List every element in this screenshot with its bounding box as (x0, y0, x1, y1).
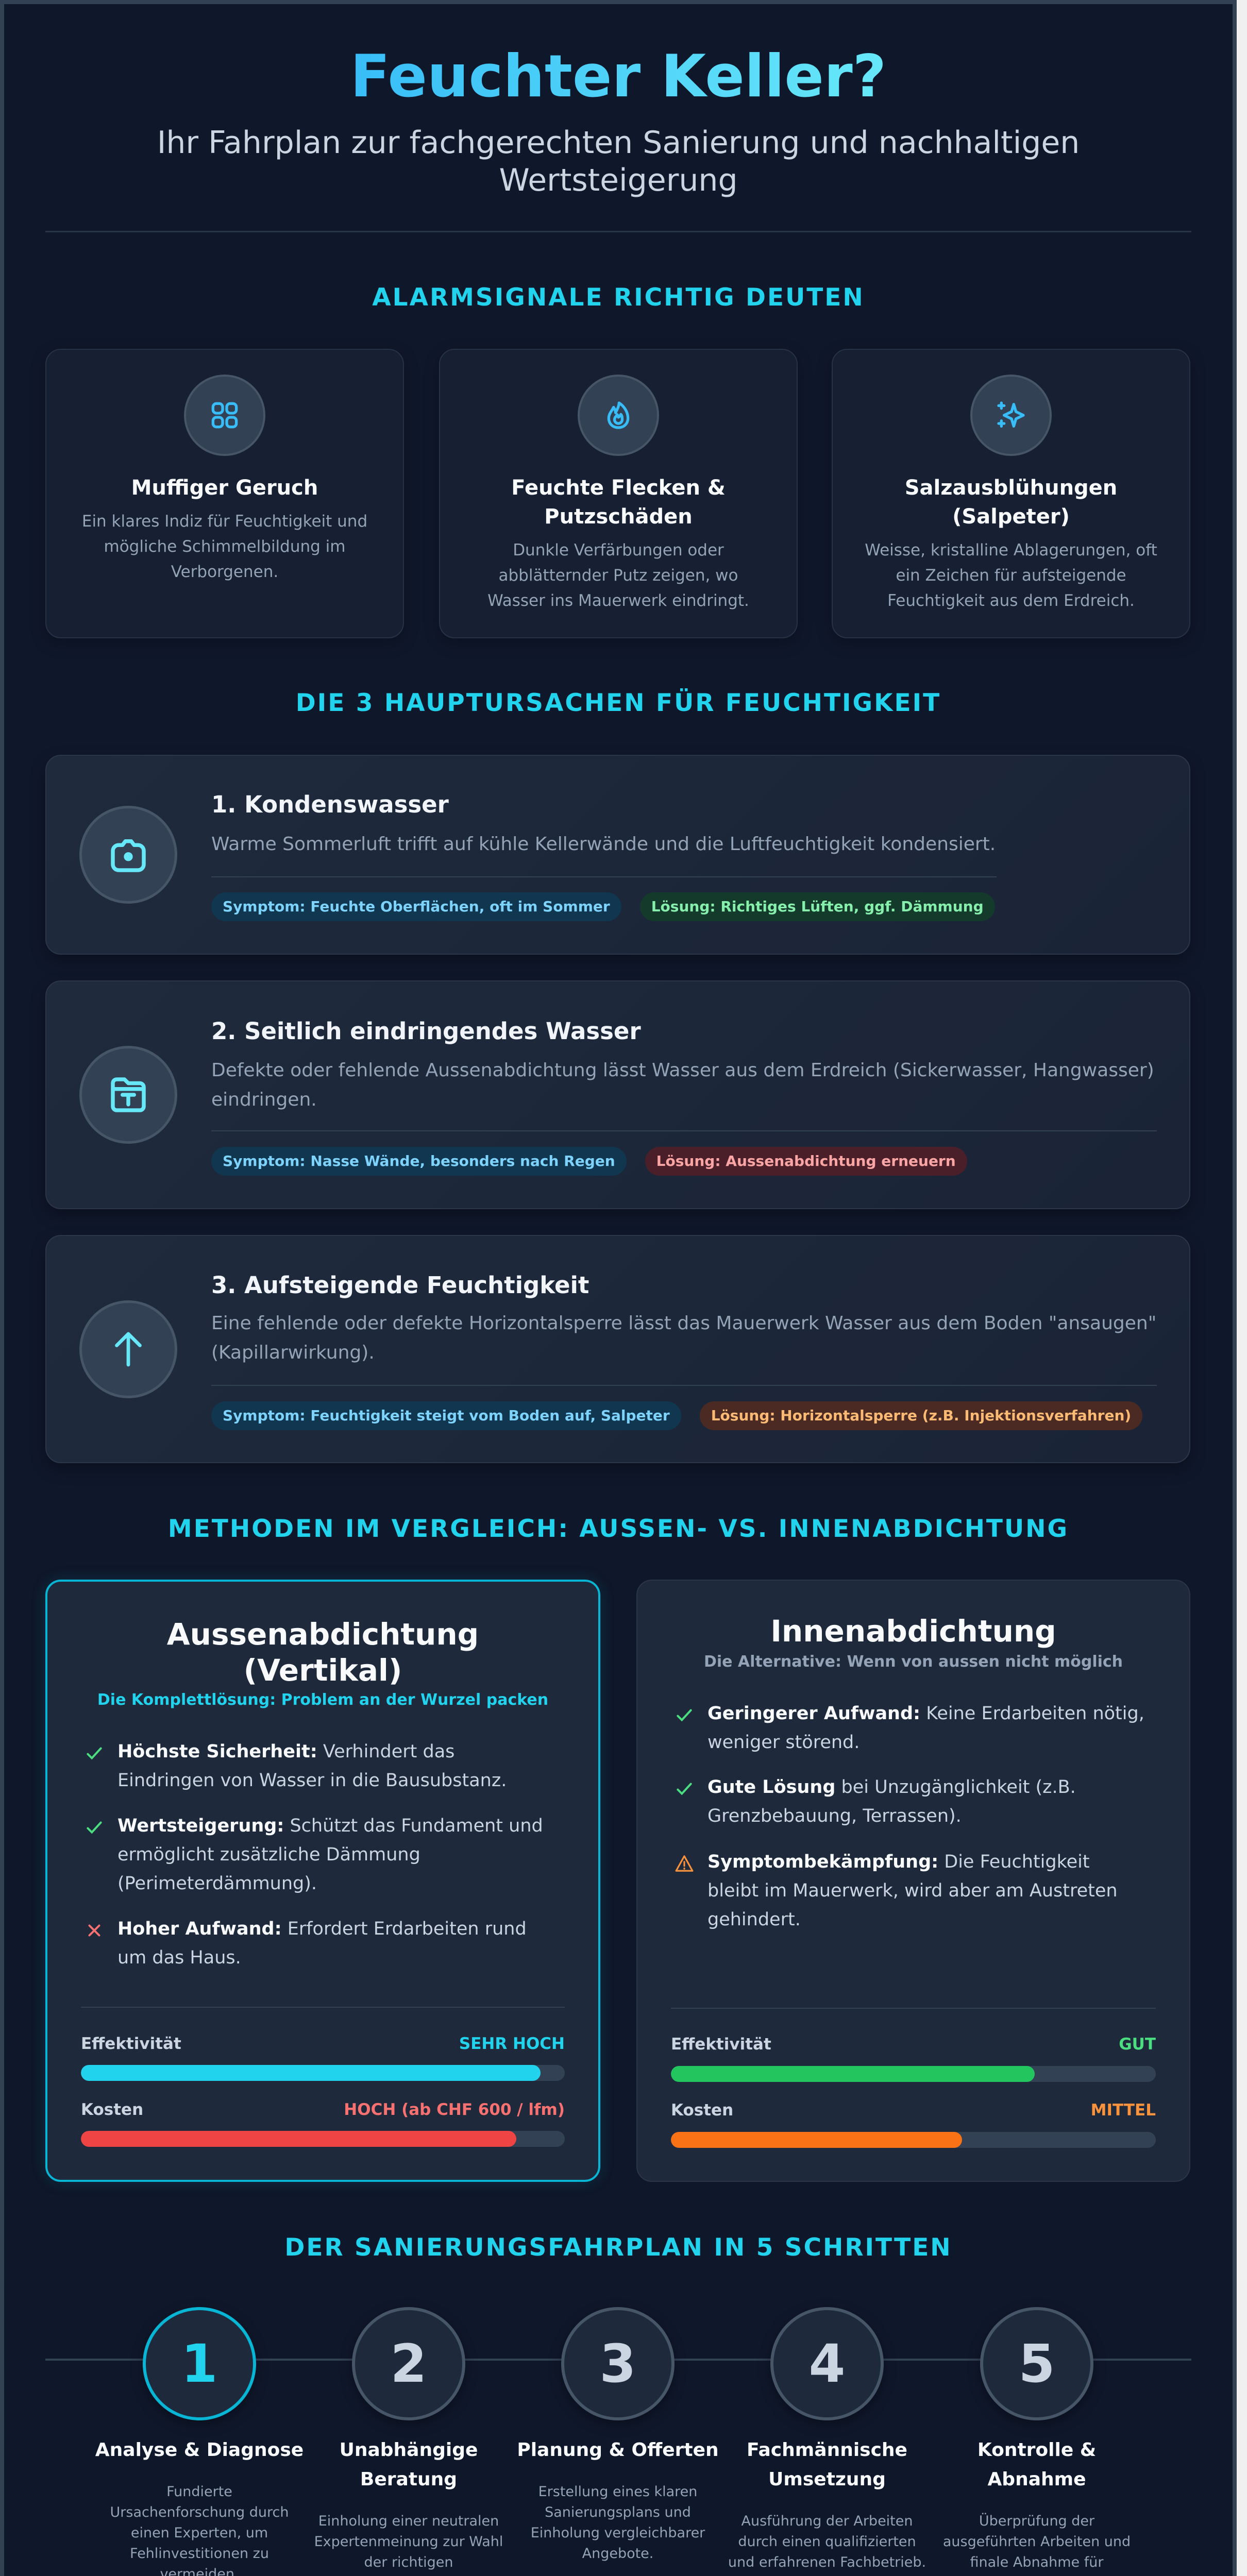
card text (82, 512, 367, 581)
metric: effektivität: Effektivität (81, 2035, 181, 2053)
panel: alarm card 2 (439, 349, 798, 638)
card title (511, 476, 726, 529)
step title: Fachmännische (747, 2439, 907, 2461)
step text: Einholung vergleichbarer (531, 2525, 705, 2541)
subtitle: Ihr Fahrplan zur fachgerechten Sanierung und nachhaltigen (157, 125, 1080, 161)
tags: Symptom: Nasse Wände, besonders nach Regen (223, 1153, 615, 1170)
step text (510, 2482, 726, 2564)
title: Feuchter Keller? (350, 42, 886, 110)
pro item (87, 1816, 543, 1894)
tags: Lösung: Aussenabdichtung erneuern (656, 1153, 956, 1170)
step title: Beratung (360, 2469, 457, 2490)
pro item: Grenzbebauung, Terrassen). (707, 1806, 962, 1826)
cause title: 1. Kondenswasser (211, 791, 449, 818)
panel title (167, 1617, 479, 1688)
panel: cause 3 (45, 1235, 1190, 1463)
step text: Ausführung der Arbeiten (741, 2513, 913, 2529)
step text: Expertenmeinung zur Wahl (314, 2534, 503, 2550)
step text: Einholung einer neutralen (318, 2513, 499, 2529)
card text (487, 541, 749, 610)
step 5 (929, 2307, 1145, 2576)
pro item: Geringerer Aufwand: Keine Erdarbeiten nötig, (707, 1703, 1144, 1724)
step text: Angebote. (582, 2546, 653, 2562)
subtitle: Wertsteigerung (499, 162, 738, 198)
warning item: gehindert. (707, 1909, 801, 1930)
cause text (211, 1313, 1156, 1363)
step number (561, 2307, 675, 2420)
heading: alarmsignale: ALARMSIGNALE RICHTIG DEUTEN (372, 283, 865, 312)
metric: kosten (81, 2100, 565, 2119)
step text (300, 2511, 517, 2576)
warning item: bleibt im Mauerwerk, wird aber am Austreten (707, 1880, 1118, 1901)
step text: durch einen qualifizierten (738, 2534, 916, 2550)
panel: alarm card 3 (832, 349, 1190, 638)
heading: fahrplan: DER SANIERUNGSFAHRPLAN IN 5 SCHRITTEN (284, 2233, 952, 2262)
card text: ein Zeichen für aufsteigende (896, 566, 1126, 585)
icon: folder (79, 1046, 177, 1144)
step number (352, 2307, 465, 2420)
step number (143, 2307, 256, 2420)
panel: aussenabdichtung (45, 1580, 600, 2182)
step title (929, 2435, 1145, 2494)
step title: Analyse & Diagnose (95, 2439, 304, 2461)
cause text (211, 1060, 1154, 1110)
step title (300, 2435, 517, 2494)
card title: Salzausblühungen (905, 476, 1117, 500)
heading: ursachen: DIE 3 HAUPTURSACHEN FÜR FEUCHTIGKEIT (296, 689, 941, 717)
icon: grid (184, 375, 265, 456)
card text: mögliche Schimmelbildung im (104, 537, 345, 556)
panel title: (Vertikal) (244, 1653, 402, 1688)
bar: kosten (81, 2131, 565, 2147)
con item (88, 1919, 527, 1968)
pro item: (Perimeterdämmung). (117, 1873, 317, 1894)
tags (211, 1147, 967, 1176)
pro item: Gute Lösung bei Unzugänglichkeit (z.B. (707, 1777, 1076, 1798)
step text: einen Experten, um (131, 2525, 268, 2541)
step number: 2 (391, 2333, 427, 2395)
card text: abblätternder Putz zeigen, wo (499, 566, 738, 585)
pro item: Wertsteigerung: Schützt das Fundament und (117, 1816, 543, 1836)
metric: effektivität: GUT (1119, 2035, 1156, 2054)
step title: Kontrolle & (978, 2439, 1096, 2461)
card text (865, 541, 1157, 610)
icon: flame (578, 375, 659, 456)
panel title: Aussenabdichtung (167, 1617, 479, 1652)
step number: 4 (809, 2333, 845, 2395)
icon: arrow up (79, 1300, 177, 1398)
panel: cause 1 (45, 755, 1190, 955)
card text: Wasser ins Mauerwerk eindringt. (487, 591, 749, 610)
pro item: weniger störend. (707, 1732, 860, 1753)
pro item (677, 1777, 1076, 1826)
step 2 (300, 2307, 517, 2576)
step text: ausgeführten Arbeiten und (943, 2534, 1131, 2550)
cause text: Warme Sommerluft trifft auf kühle Kellerwände und die Luftfeuchtigkeit kondensiert. (211, 834, 996, 855)
card title (905, 476, 1117, 529)
tags: Lösung: Richtiges Lüften, ggf. Dämmung (651, 898, 984, 915)
metric: kosten: HOCH (ab CHF 600 / lfm) (344, 2100, 565, 2119)
cause text: eindringen. (211, 1089, 317, 1110)
tags: Symptom: Feuchte Oberflächen, oft im Sommer (223, 898, 610, 915)
step text: Überprüfung der (979, 2513, 1094, 2529)
metric: kosten: Kosten (81, 2100, 143, 2119)
card text: Ein klares Indiz für Feuchtigkeit und (82, 512, 367, 531)
step text: Erstellung eines klaren (538, 2484, 697, 2500)
metric: effektivität (671, 2034, 1156, 2055)
card text: Dunkle Verfärbungen oder (513, 541, 724, 560)
pro item: ermöglicht zusätzliche Dämmung (117, 1844, 420, 1865)
step title: Planung & Offerten (517, 2439, 719, 2461)
card title: Putzschäden (544, 505, 693, 529)
card text: Weisse, kristalline Ablagerungen, oft (865, 541, 1157, 560)
step 3 (510, 2307, 726, 2564)
panel subtitle: Die Komplettlösung: Problem an der Wurzel packen (97, 1691, 548, 1709)
metric: kosten: MITTEL (1091, 2101, 1156, 2120)
warning item (675, 1852, 1118, 1930)
step title: Umsetzung (768, 2469, 886, 2490)
step text: Sanierungsplans und (545, 2504, 691, 2520)
step title (719, 2435, 935, 2494)
step text (719, 2511, 935, 2573)
bar: effektivität (671, 2066, 1156, 2082)
card title: Feuchte Flecken & (511, 476, 726, 500)
step number: 3 (600, 2333, 636, 2395)
warning item: Symptombekämpfung: Die Feuchtigkeit (707, 1852, 1090, 1872)
cause title: 3. Aufsteigende Feuchtigkeit (211, 1272, 589, 1299)
cause text: (Kapillarwirkung). (211, 1342, 375, 1363)
cause text: Defekte oder fehlende Aussenabdichtung lässt Wasser aus dem Erdreich (Sickerwasser, Hangwasser) (211, 1060, 1154, 1081)
step number (770, 2307, 884, 2420)
pro item: Höchste Sicherheit: Verhindert das (117, 1741, 454, 1762)
step number: 1 (181, 2333, 217, 2395)
step text: finale Abnahme für (970, 2554, 1103, 2570)
step text (929, 2511, 1145, 2576)
step text: Ursachenforschung durch (110, 2504, 289, 2520)
pro item (677, 1703, 1144, 1753)
step text: der richtigen (364, 2554, 453, 2570)
step number: 5 (1018, 2333, 1055, 2395)
icon: sparkles (970, 375, 1052, 456)
tags: Symptom: Feuchtigkeit steigt vom Boden auf, Salpeter (223, 1407, 670, 1424)
panel subtitle: Die Alternative: Wenn von aussen nicht möglich (704, 1653, 1123, 1671)
panel: alarm card 1 (45, 349, 404, 638)
pro item: Eindringen von Wasser in die Bausubstanz. (117, 1770, 507, 1791)
step title: Abnahme (987, 2469, 1086, 2490)
tags (211, 1401, 1142, 1430)
step text: Fehlinvestitionen zu (130, 2546, 269, 2562)
metric: effektivität: SEHR HOCH (459, 2035, 565, 2053)
card text: Feuchtigkeit aus dem Erdreich. (887, 591, 1135, 610)
cause title: 2. Seitlich eindringendes Wasser (211, 1018, 641, 1045)
subtitle (157, 125, 1080, 198)
bar: kosten (671, 2132, 1156, 2148)
panel title: Innenabdichtung (770, 1614, 1056, 1649)
card text: Verborgenen. (171, 563, 278, 581)
step number (980, 2307, 1093, 2420)
bar: effektivität (81, 2065, 565, 2081)
step 1 (91, 2307, 308, 2576)
tags (211, 892, 995, 921)
con item: um das Haus. (117, 1947, 241, 1968)
metric: kosten (671, 2100, 1156, 2121)
panel: cause 2 (45, 980, 1190, 1209)
card title: Muffiger Geruch (131, 476, 318, 500)
pro item (87, 1741, 507, 1791)
icon: camera (79, 806, 177, 904)
metric: kosten: Kosten (671, 2101, 733, 2120)
panel: innenabdichtung (636, 1580, 1190, 2182)
con item: Hoher Aufwand: Erfordert Erdarbeiten rund (117, 1919, 527, 1939)
metric: effektivität: Effektivität (671, 2035, 771, 2054)
step text: Fundierte (166, 2484, 232, 2500)
metric: effektivität (81, 2035, 565, 2053)
step 4 (719, 2307, 935, 2573)
step title: Unabhängige (340, 2439, 478, 2461)
tags: Lösung: Horizontalsperre (z.B. Injektionsverfahren) (711, 1407, 1131, 1424)
step text: und erfahrenen Fachbetrieb. (728, 2554, 926, 2570)
heading: methoden: METHODEN IM VERGLEICH: AUSSEN- VS. INNENABDICHTUNG (168, 1515, 1069, 1543)
step text (91, 2482, 308, 2576)
card title: (Salpeter) (952, 505, 1070, 529)
cause text: Eine fehlende oder defekte Horizontalsperre lässt das Mauerwerk Wasser aus dem Boden "ansaugen" (211, 1313, 1156, 1334)
